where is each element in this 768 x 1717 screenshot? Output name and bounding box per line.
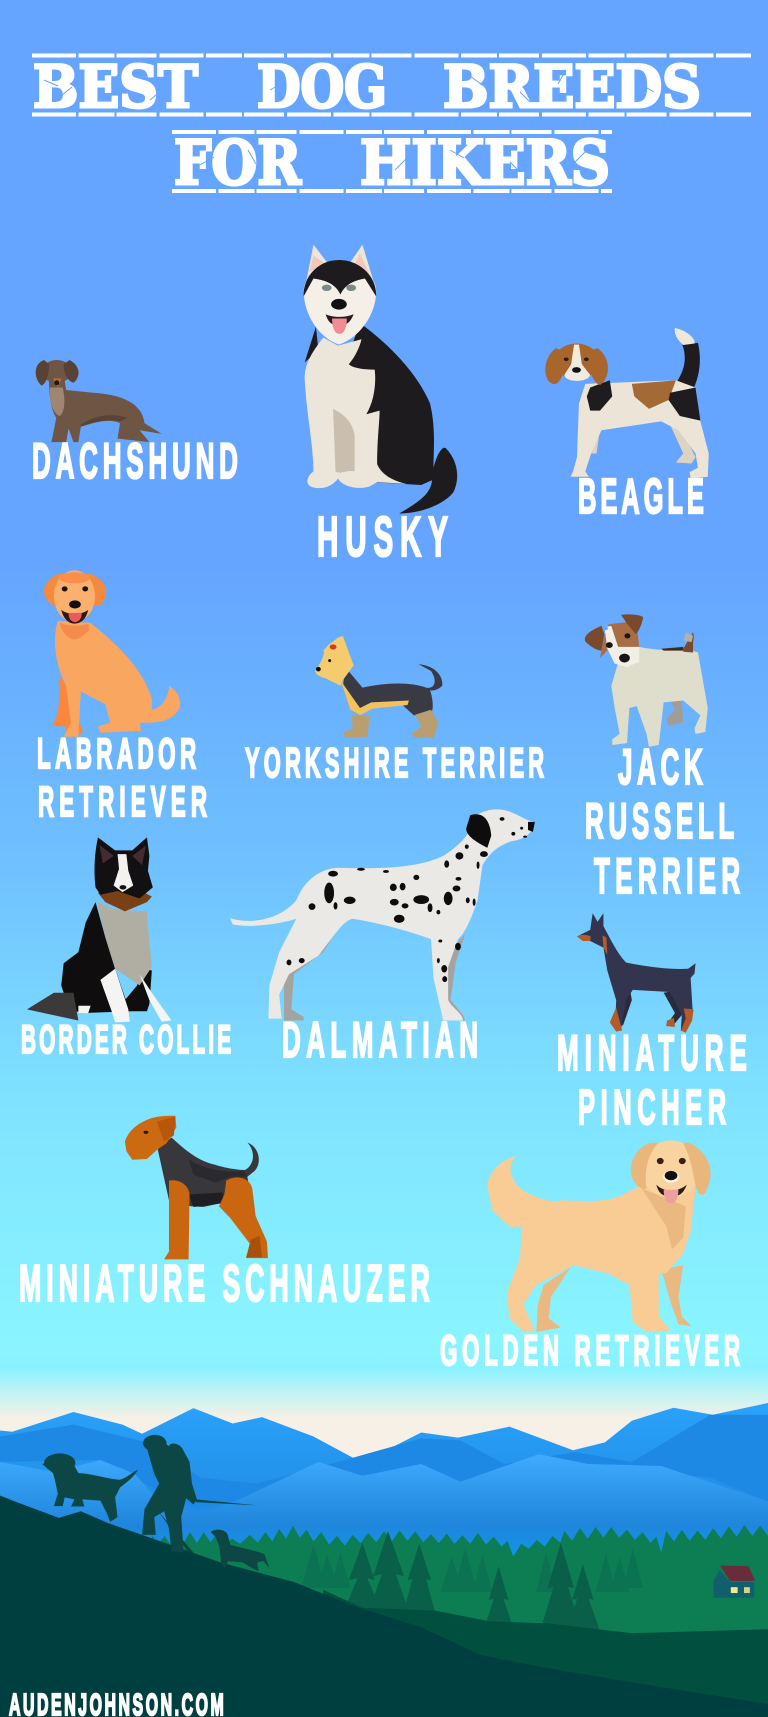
label: Beagle: BEAGLE bbox=[578, 470, 704, 524]
title: BEST bbox=[33, 53, 198, 121]
label: Husky: HUSKY bbox=[317, 505, 448, 569]
label: Labrador Retriever: LABRADOR bbox=[37, 730, 196, 778]
label: Miniature Pincher: PINCHER bbox=[578, 1081, 726, 1135]
title: FOR bbox=[174, 128, 302, 199]
dog: dalmatian bbox=[230, 809, 535, 1021]
dog: golden retriever bbox=[487, 1141, 711, 1332]
dog: beagle bbox=[545, 328, 709, 479]
silhouette: hiker bbox=[142, 1435, 257, 1553]
dogs in the upper section bbox=[36, 245, 709, 514]
mountain landscape bbox=[0, 1403, 768, 1717]
dog: jack russell terrier bbox=[585, 614, 708, 747]
back mountains bbox=[0, 1403, 768, 1572]
label: Miniature Schnauzer: MINIATURE SCHNAUZER bbox=[19, 1255, 430, 1312]
dogs in the middle section bbox=[27, 570, 708, 1033]
silhouette: dachshund bbox=[211, 1530, 269, 1571]
silhouette: large dog bbox=[42, 1453, 138, 1522]
label: Labrador Retriever: RETRIEVER bbox=[38, 778, 207, 826]
label: Jack Russell Terrier: TERRIER bbox=[594, 849, 740, 904]
dog: border collie bbox=[27, 837, 171, 1022]
dog: yorkshire terrier bbox=[315, 636, 442, 738]
front mountains bbox=[0, 1454, 768, 1572]
title: DOG bbox=[257, 53, 387, 121]
label: Border Collie: BORDER COLLIE bbox=[21, 1017, 231, 1062]
label: Dalmatian: DALMATIAN bbox=[282, 1013, 478, 1068]
mountain shaded facets bbox=[0, 1415, 768, 1509]
labels bbox=[19, 434, 747, 1375]
label: Miniature Pincher: MINIATURE bbox=[557, 1026, 747, 1081]
middle hill bbox=[323, 1590, 768, 1717]
forest bbox=[152, 1525, 768, 1651]
foreground hill bbox=[0, 1495, 768, 1717]
label: Jack Russell Terrier: RUSSELL bbox=[585, 794, 734, 849]
label: Jack Russell Terrier bbox=[585, 740, 740, 904]
dog: husky bbox=[304, 245, 457, 514]
label: Dachshund: DACHSHUND bbox=[32, 434, 238, 489]
dog: labrador retriever bbox=[44, 570, 180, 737]
title: HIKERS bbox=[360, 128, 610, 199]
label: Golden Retriever: GOLDEN RETRIEVER bbox=[440, 1327, 740, 1375]
label: Labrador Retriever bbox=[37, 730, 207, 826]
title bbox=[32, 53, 751, 199]
dog: miniature pincher bbox=[577, 913, 696, 1033]
distant trees bbox=[301, 1545, 643, 1592]
label: Jack Russell Terrier: JACK bbox=[618, 740, 703, 795]
title: BREEDS bbox=[443, 53, 701, 121]
label: Miniature Pincher bbox=[557, 1026, 747, 1135]
label: Yorkshire Terrier: YORKSHIRE TERRIER bbox=[245, 741, 544, 787]
dog: dachshund bbox=[36, 360, 162, 442]
icon: house bbox=[714, 1566, 755, 1598]
dogs in the lower section bbox=[125, 1116, 711, 1332]
dog: miniature schnauzer bbox=[125, 1116, 268, 1259]
foreground trees bbox=[345, 1531, 600, 1631]
